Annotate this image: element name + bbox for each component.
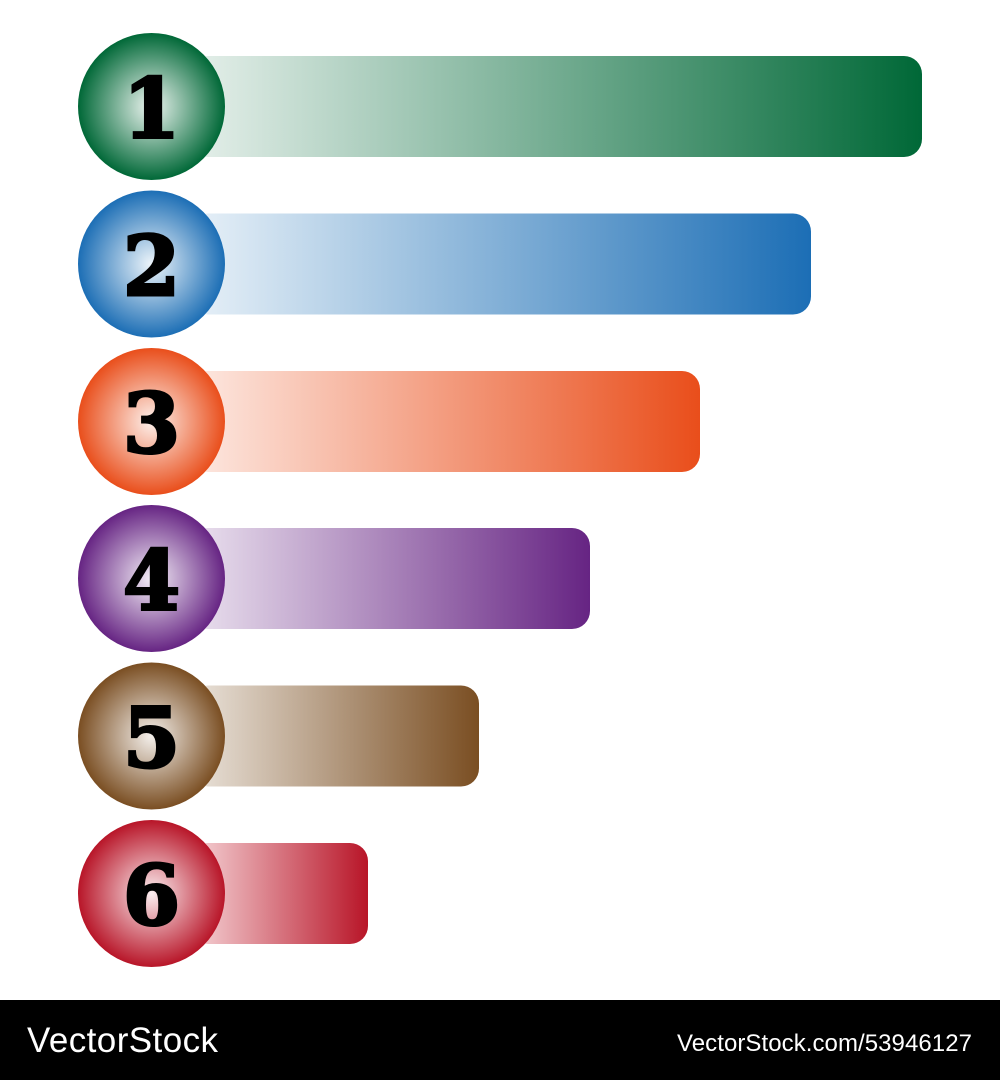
number 2: 2	[123, 219, 180, 315]
bar 5	[190, 686, 479, 786]
circle 4	[78, 505, 225, 652]
panel: row 5	[78, 662, 479, 810]
bar 1	[190, 56, 922, 157]
circle 6	[78, 820, 225, 967]
circle 3	[78, 348, 225, 495]
panel: row 2	[78, 190, 811, 338]
footer band	[0, 1000, 1000, 1080]
panel: row 4	[78, 505, 590, 652]
bar 2	[190, 214, 811, 314]
circle 1	[78, 33, 225, 180]
panel: row 1	[78, 33, 922, 180]
bar 4	[190, 528, 590, 629]
bar 3	[190, 371, 700, 472]
panel: row 3	[78, 348, 700, 495]
circle 2	[78, 190, 225, 338]
footer brand name: VectorStock	[27, 1021, 218, 1060]
circle 5	[78, 662, 225, 810]
number 6: 6	[123, 848, 180, 944]
number 4: 4	[123, 534, 180, 630]
number 3: 3	[123, 376, 180, 472]
panel: row 6	[78, 820, 368, 967]
number 5: 5	[123, 691, 180, 787]
bar 6	[190, 843, 368, 944]
footer image id: VectorStock.com/53946127	[677, 1030, 972, 1057]
number 1: 1	[123, 62, 180, 158]
